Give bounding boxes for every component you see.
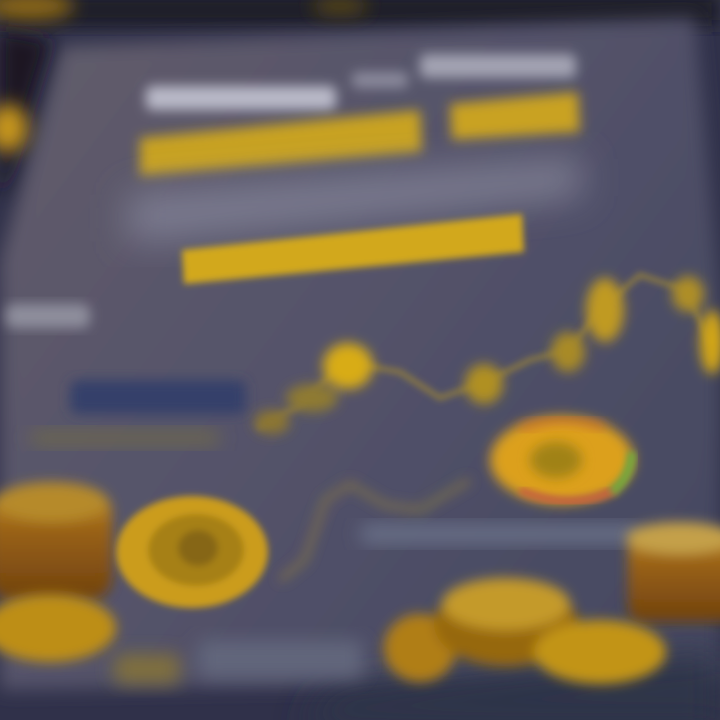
chart markers — [254, 276, 720, 434]
line chart lower — [280, 480, 470, 580]
blue label — [70, 380, 246, 414]
pie gauge — [490, 416, 634, 504]
title line 2 yellow — [140, 92, 580, 176]
faint caption under blue label — [30, 430, 220, 446]
dark lower edge — [300, 650, 720, 720]
bottom caption — [114, 640, 363, 684]
faint text right of lower chart — [360, 524, 640, 544]
coin pile bottom — [384, 578, 666, 684]
left small label — [6, 304, 90, 328]
coin stack right — [626, 522, 720, 622]
line chart upper — [254, 275, 720, 434]
title line 1 — [146, 54, 576, 110]
top-left dark corner — [0, 30, 50, 200]
yellow banner — [182, 214, 524, 284]
coin stack left — [0, 482, 112, 600]
dark top strip — [0, 0, 720, 26]
decorative glows: top coins — [0, 0, 368, 152]
large coin — [116, 496, 268, 608]
flat coin bottom left — [0, 594, 116, 662]
subtitle text block — [128, 158, 582, 242]
